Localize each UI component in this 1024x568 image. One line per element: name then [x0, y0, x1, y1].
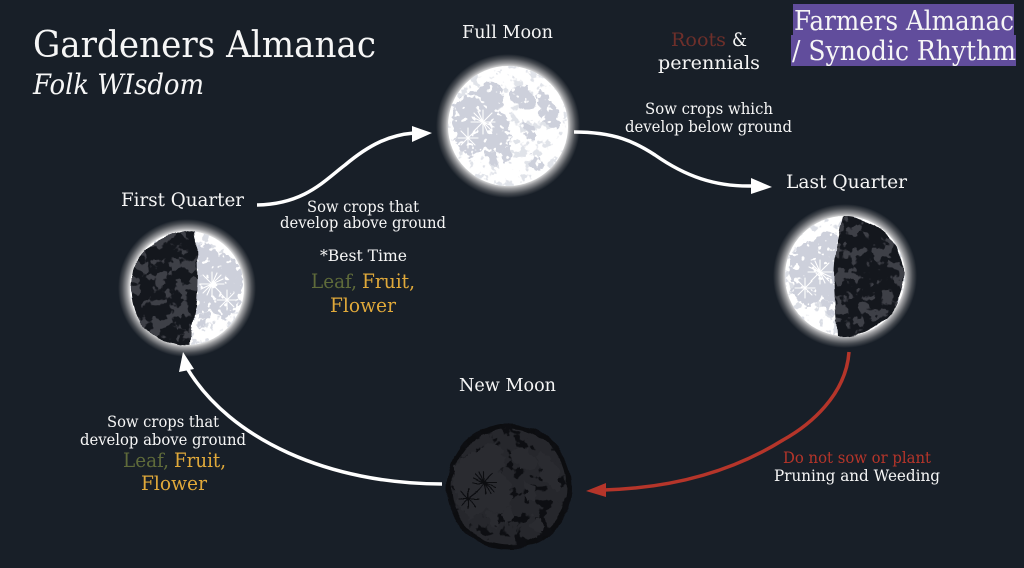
moon: new [446, 424, 572, 550]
text: sow above ground (upper) [280, 198, 446, 232]
text: sow above ground (upper): develop above ground [280, 214, 446, 232]
text: sow above ground (lower): Leaf, [123, 448, 169, 472]
label: Farmers Almanac tag [791, 4, 1016, 67]
label: First Quarter: First Quarter [121, 189, 245, 211]
label: Full Moon: Full Moon [462, 23, 553, 43]
text: sow above ground (lower): Flower [141, 471, 207, 495]
text: sow above ground (lower): Fruit, [174, 448, 226, 472]
dark half [130, 230, 198, 346]
subtitle: Folk WIsdom [32, 68, 204, 101]
text: best time: Leaf, [311, 269, 357, 293]
text: sow above ground (lower): Sow crops that [107, 413, 220, 431]
arrow: full moon to last quarter [574, 132, 772, 194]
text: do not sow, pruning: Pruning and Weeding [774, 467, 940, 485]
text: sow below ground [625, 100, 792, 136]
label: New Moon: New Moon [459, 376, 556, 396]
text: roots and perennials: perennials [658, 52, 760, 74]
arrow: last quarter to new moon (red) [586, 352, 849, 497]
text: sow below ground: develop below ground [625, 118, 792, 136]
title [32, 25, 376, 101]
text: best time: *Best Time [320, 247, 407, 265]
text: best time: Fruit, [362, 269, 415, 293]
text: do not sow, pruning [774, 449, 940, 485]
text: best time: Flower [330, 293, 396, 317]
moon: last quarter [773, 204, 917, 348]
text: sow below ground: Sow crops which [645, 100, 773, 118]
text: best time [311, 247, 415, 317]
text: roots and perennials [658, 29, 760, 74]
text: sow above ground (lower) [80, 413, 246, 495]
moon: full [436, 54, 580, 198]
text: sow above ground (lower): develop above ground [80, 431, 246, 449]
dark half [834, 216, 905, 338]
text: roots and perennials: Roots [671, 29, 726, 51]
arrow: new moon to first quarter [179, 352, 442, 484]
text: sow above ground (upper): Sow crops that [307, 198, 420, 216]
arrow: first quarter to full moon [257, 126, 432, 205]
text: roots and perennials: & [732, 29, 747, 51]
moon: first quarter [118, 219, 256, 357]
label: Last Quarter: Last Quarter [786, 171, 908, 193]
title: Gardeners Almanac [33, 25, 376, 66]
text: do not sow, pruning: Do not sow or plant [783, 449, 932, 467]
